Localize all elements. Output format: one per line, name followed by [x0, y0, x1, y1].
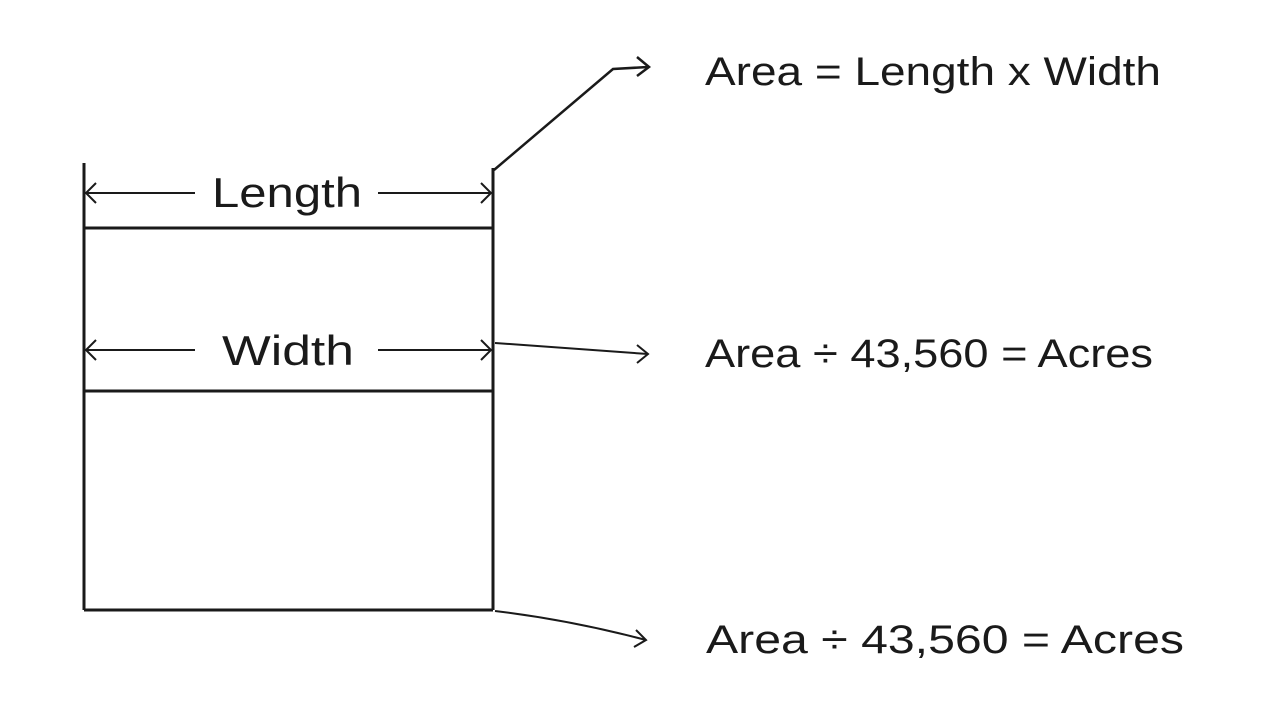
length dimension: Length — [212, 169, 362, 216]
length dimension — [86, 169, 491, 216]
formula: area: Area = Length x Width — [705, 50, 1161, 94]
arrow: middle callout — [495, 343, 648, 363]
arrow: top callout — [494, 57, 649, 170]
formula: acres 1: Area ÷ 43,560 = Acres — [705, 332, 1153, 376]
arrow: bottom callout — [495, 611, 646, 647]
formula: acres 2: Area ÷ 43,560 = Acres — [706, 618, 1184, 662]
rectangle diagram — [84, 163, 493, 610]
width dimension — [86, 327, 491, 374]
width dimension: Width — [222, 327, 354, 374]
